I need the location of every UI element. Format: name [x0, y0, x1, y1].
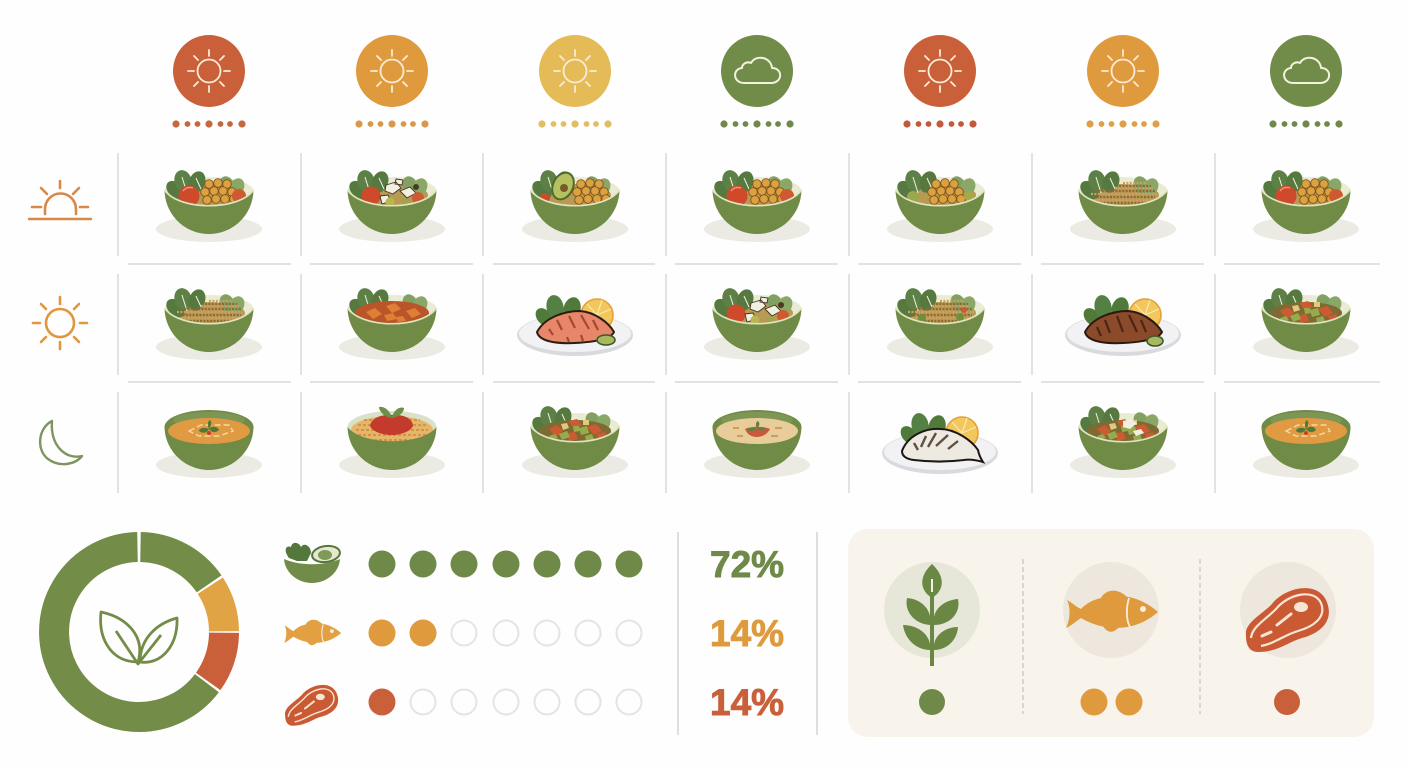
day 7: cloud	[1270, 35, 1342, 107]
icon: plant sprig	[903, 564, 958, 666]
day 6: warm sun	[1087, 35, 1159, 107]
day 1: hot sun	[173, 35, 245, 107]
serving dot	[919, 689, 945, 715]
day 2: warm sun	[356, 35, 428, 107]
meal: grilled salmon plate	[517, 294, 633, 356]
servings dots: two of seven	[368, 620, 642, 646]
donut chart: diet share	[54, 547, 224, 717]
weather header row	[172, 35, 1343, 128]
day 5: hot sun	[904, 35, 976, 107]
meal: spaghetti bowl	[339, 407, 445, 478]
servings dots: seven of seven	[368, 550, 642, 578]
icon: moon (dinner row)	[40, 421, 82, 464]
percentages	[710, 544, 784, 723]
value: plants 72%: 72%	[710, 544, 784, 585]
meal: grain bowl	[1070, 168, 1176, 242]
icon: steak	[285, 685, 338, 726]
value: meat 14%: 14%	[710, 682, 784, 723]
icon: leaves in donut centre	[101, 612, 177, 664]
icon: sun (lunch row)	[33, 297, 87, 349]
meal: grain bowl	[156, 286, 262, 360]
icon: fish	[284, 620, 341, 645]
dot strips under weather icons	[172, 120, 1343, 128]
meal: chopped vegetable bowl	[1253, 286, 1359, 360]
row: plants servings	[284, 543, 642, 583]
day 3: mild sun	[539, 35, 611, 107]
meal: grilled white fish plate	[882, 412, 998, 474]
meat column	[1240, 562, 1336, 715]
row: meat servings	[285, 685, 642, 726]
value: fish 14%: 14%	[710, 613, 784, 654]
meal: feta chopped salad bowl	[1070, 404, 1176, 478]
day 4: cloud	[721, 35, 793, 107]
icon: sunrise (breakfast row)	[29, 181, 91, 219]
serving dots	[1080, 688, 1142, 716]
meal: orange stew bowl	[339, 286, 445, 360]
icon: salad bowl	[284, 543, 341, 583]
plant column	[884, 562, 980, 715]
meal: tomato chickpea bowl	[704, 168, 810, 242]
meal: orange soup	[1253, 410, 1359, 478]
meal: feta vegetable bowl	[339, 168, 445, 242]
meal grid: lunch row	[156, 286, 1359, 360]
icon: steak	[1246, 588, 1329, 652]
meal grid: dinner row	[156, 404, 1359, 478]
row: fish servings	[284, 620, 642, 646]
meal: green grain bowl	[887, 286, 993, 360]
meal: chickpea tomato bowl	[156, 168, 262, 242]
meal: grilled steak plate	[1065, 294, 1181, 356]
meal: feta vegetable bowl	[704, 286, 810, 360]
meal: avocado chickpea bowl	[522, 168, 628, 242]
icon: fish	[1066, 591, 1158, 632]
meal: chickpea bowl	[887, 168, 993, 242]
meal: orange soup	[156, 410, 262, 478]
meal grid: breakfast row	[156, 168, 1359, 242]
fish column	[1063, 562, 1159, 716]
meal: chopped vegetable bowl	[522, 404, 628, 478]
panel: food type summary	[848, 529, 1374, 737]
serving dot	[1274, 689, 1300, 715]
meal: creamy soup	[704, 410, 810, 478]
servings dots: one of seven	[368, 688, 642, 716]
meal: tomato chickpea bowl	[1253, 168, 1359, 242]
